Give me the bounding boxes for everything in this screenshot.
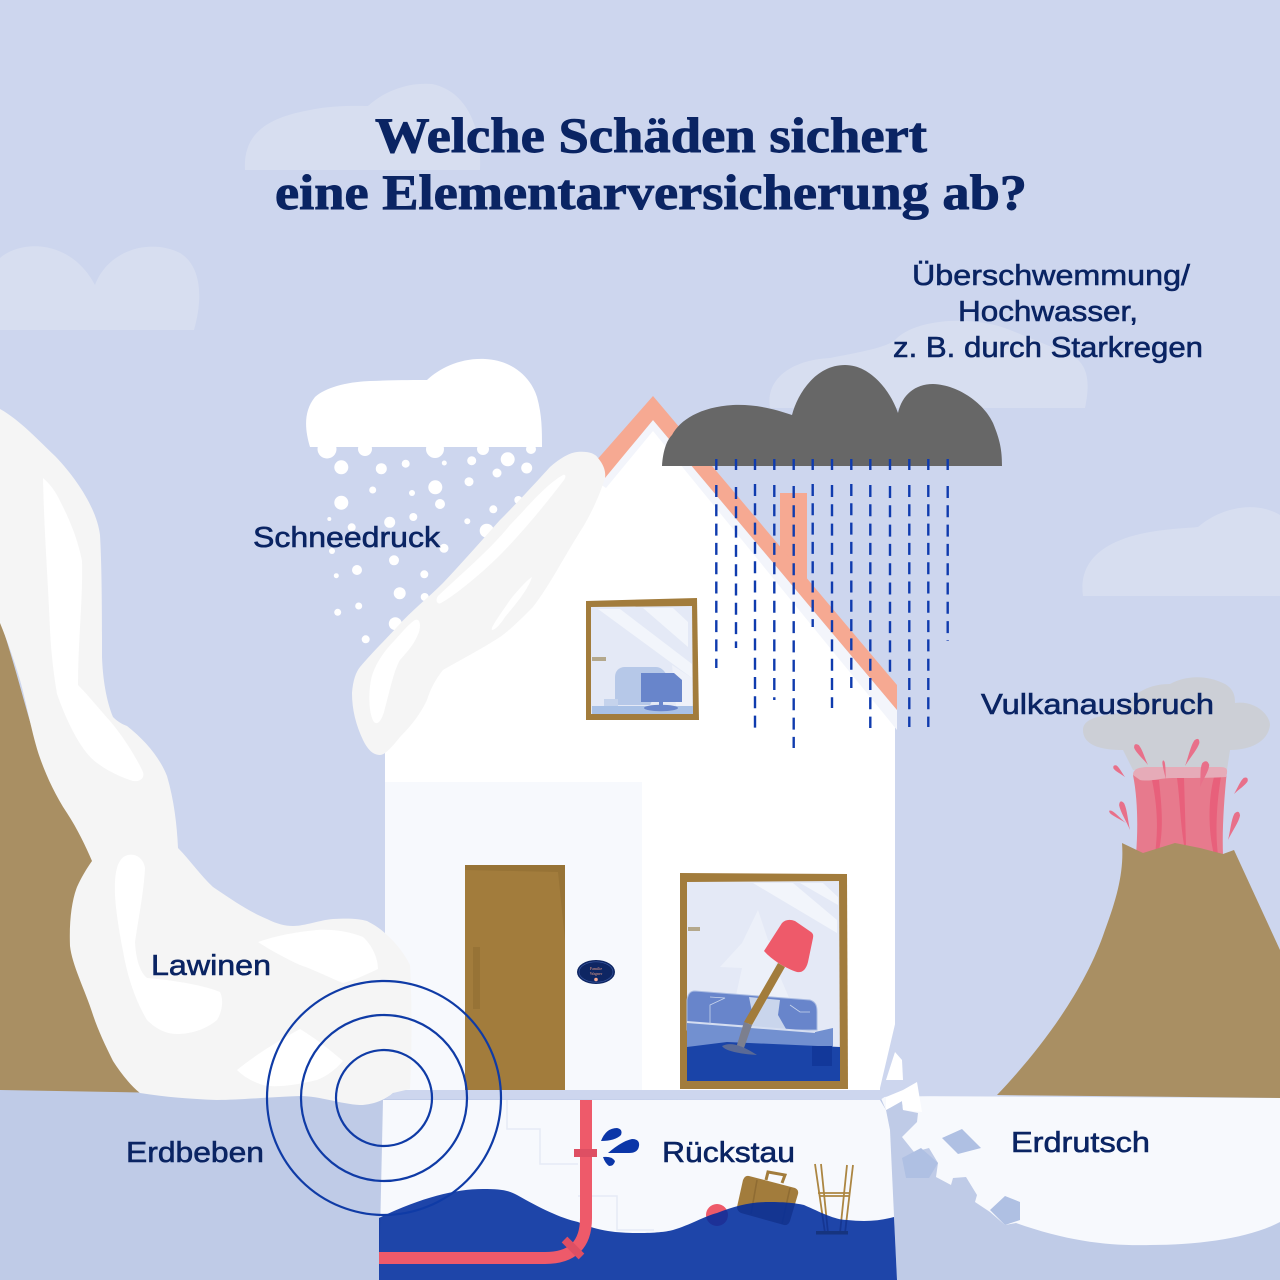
lava column <box>1133 767 1227 855</box>
entrance wall <box>385 782 642 1090</box>
roof inner edge <box>600 420 897 730</box>
background clouds <box>0 84 1280 596</box>
volcano mountain <box>997 843 1280 1098</box>
avalanche <box>0 409 412 1105</box>
label: flood <box>893 260 1203 364</box>
label: avalanches: Lawinen <box>151 950 271 982</box>
house wall <box>385 430 895 1090</box>
label: earthquake: Erdbeben <box>126 1137 264 1169</box>
label: snow pressure: Schneedruck <box>253 522 441 554</box>
title: eine Elementarversicherung ab? <box>275 164 1027 220</box>
chimney <box>780 493 807 582</box>
suitcase <box>737 1172 798 1225</box>
rain <box>716 459 948 748</box>
name plate: Wagner <box>590 971 603 976</box>
floor lamp <box>722 920 813 1055</box>
television <box>641 673 682 711</box>
rubble <box>902 1129 1020 1225</box>
lava spatters <box>1108 738 1249 841</box>
water in room <box>687 1042 840 1081</box>
storm cloud <box>662 365 1002 466</box>
label: flood: z. B. durch Starkregen <box>893 332 1203 364</box>
earthquake rings <box>267 981 501 1215</box>
smoke cloud <box>1083 677 1270 770</box>
title: Welche Schäden sichert <box>375 107 927 163</box>
left mountain <box>0 620 170 1093</box>
roof <box>595 396 897 710</box>
label: flood: Hochwasser, <box>958 296 1138 328</box>
label: volcano: Vulkanausbruch <box>981 689 1214 721</box>
house <box>385 396 897 1090</box>
label: backflow: Rückstau <box>662 1137 795 1169</box>
title <box>275 107 1027 220</box>
door <box>465 865 565 1090</box>
snow cloud <box>306 359 542 458</box>
ground <box>0 1090 1280 1280</box>
flood water <box>379 1189 897 1280</box>
snow on roof <box>352 452 605 755</box>
basement floor band <box>385 1090 895 1100</box>
snowflakes <box>327 452 532 643</box>
foundation crack <box>880 1020 930 1112</box>
red ball <box>706 1204 728 1226</box>
sofa <box>687 991 833 1070</box>
label: flood: Überschwemmung/ <box>912 260 1191 292</box>
stool <box>815 1164 853 1233</box>
burst pipe <box>379 1100 597 1259</box>
lower window <box>680 873 848 1089</box>
water drops <box>601 1128 639 1166</box>
volcano <box>997 677 1280 1098</box>
label: landslide: Erdrutsch <box>1011 1127 1150 1159</box>
name plate <box>577 960 615 984</box>
basement <box>379 1090 897 1280</box>
upper window <box>586 598 699 720</box>
name plate: Familie <box>590 966 602 971</box>
